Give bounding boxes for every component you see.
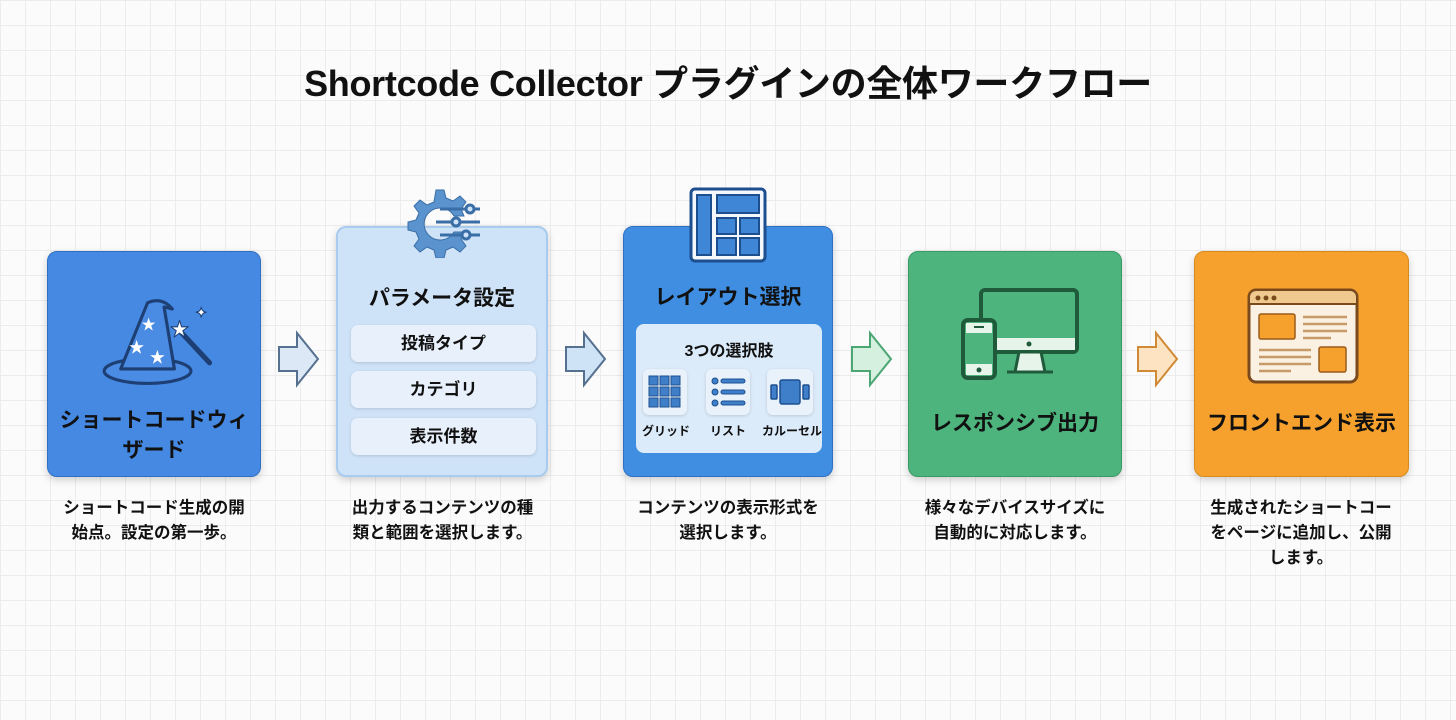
subheading: 3つの選択肢 [685,343,773,360]
panel: parameter settings [336,226,548,477]
panel: responsive output [908,251,1122,477]
icon: browser page [1248,288,1358,384]
heading [60,409,248,462]
item: category: カテゴリ [410,380,478,399]
description 3: コンテンツの表示形式を [637,499,819,517]
arrow 4 [1137,330,1178,388]
icon: wizard hat: ★ [141,318,156,334]
item: post type [351,325,536,362]
icon: wizard hat: ★ [129,339,144,356]
arrow 2 [565,330,606,388]
heading: パラメータ設定 [369,287,515,310]
description 2 [352,498,533,542]
description 5 [1210,498,1392,567]
description 3 [637,498,819,542]
icon: layout [690,188,766,262]
subpanel: three options: リスト [710,424,746,438]
description 5: します。 [1269,549,1333,567]
panel: frontend display [1194,251,1409,477]
description 4: 自動的に対応します。 [933,524,1097,542]
option: list [706,369,750,415]
description 4: 様々なデバイスサイズに [925,499,1105,517]
arrow 1 [278,330,320,388]
heading: フロントエンド表示 [1207,412,1396,435]
item: count [351,418,536,455]
description 1: ショートコード生成の開 [63,499,245,517]
subpanel: three options: カルーセル [762,424,822,438]
icon: gear sliders [408,190,480,258]
labels: グリッド [642,424,690,438]
description 2: 出力するコンテンツの種 [352,499,533,517]
option: grid [643,369,687,415]
heading: ザード [122,439,186,462]
heading: レイアウト選択 [654,286,802,309]
description 1 [63,498,245,542]
item: category [351,371,536,408]
icon: wizard hat: ✦ [195,305,207,321]
item: post type: 投稿タイプ [401,334,486,353]
description 3: 選択します。 [679,524,777,542]
option: carousel [767,369,813,415]
title: Shortcode Collector プラグインの全体ワークフロー [304,63,1152,104]
icon: wizard hat: ★ [170,319,189,340]
icon: devices [961,288,1079,380]
icon: wizard hat [102,299,212,385]
arrow 3 [851,330,892,388]
description 5: 生成されたショートコー [1210,499,1392,517]
panel: shortcode wizard [47,251,261,477]
description 4 [925,498,1105,542]
icon: wizard hat: ★ [150,350,165,367]
heading: レスポンシブ出力 [931,412,1099,435]
panel: layout selection [623,226,833,477]
description 2: 類と範囲を選択します。 [353,524,532,542]
description 1: 始点。設定の第一歩。 [72,524,236,542]
subpanel: three options [636,324,822,453]
heading: ショートコードウィ [60,409,248,432]
item: count: 表示件数 [410,427,478,446]
description 5: をページに追加し、公開 [1210,524,1392,542]
